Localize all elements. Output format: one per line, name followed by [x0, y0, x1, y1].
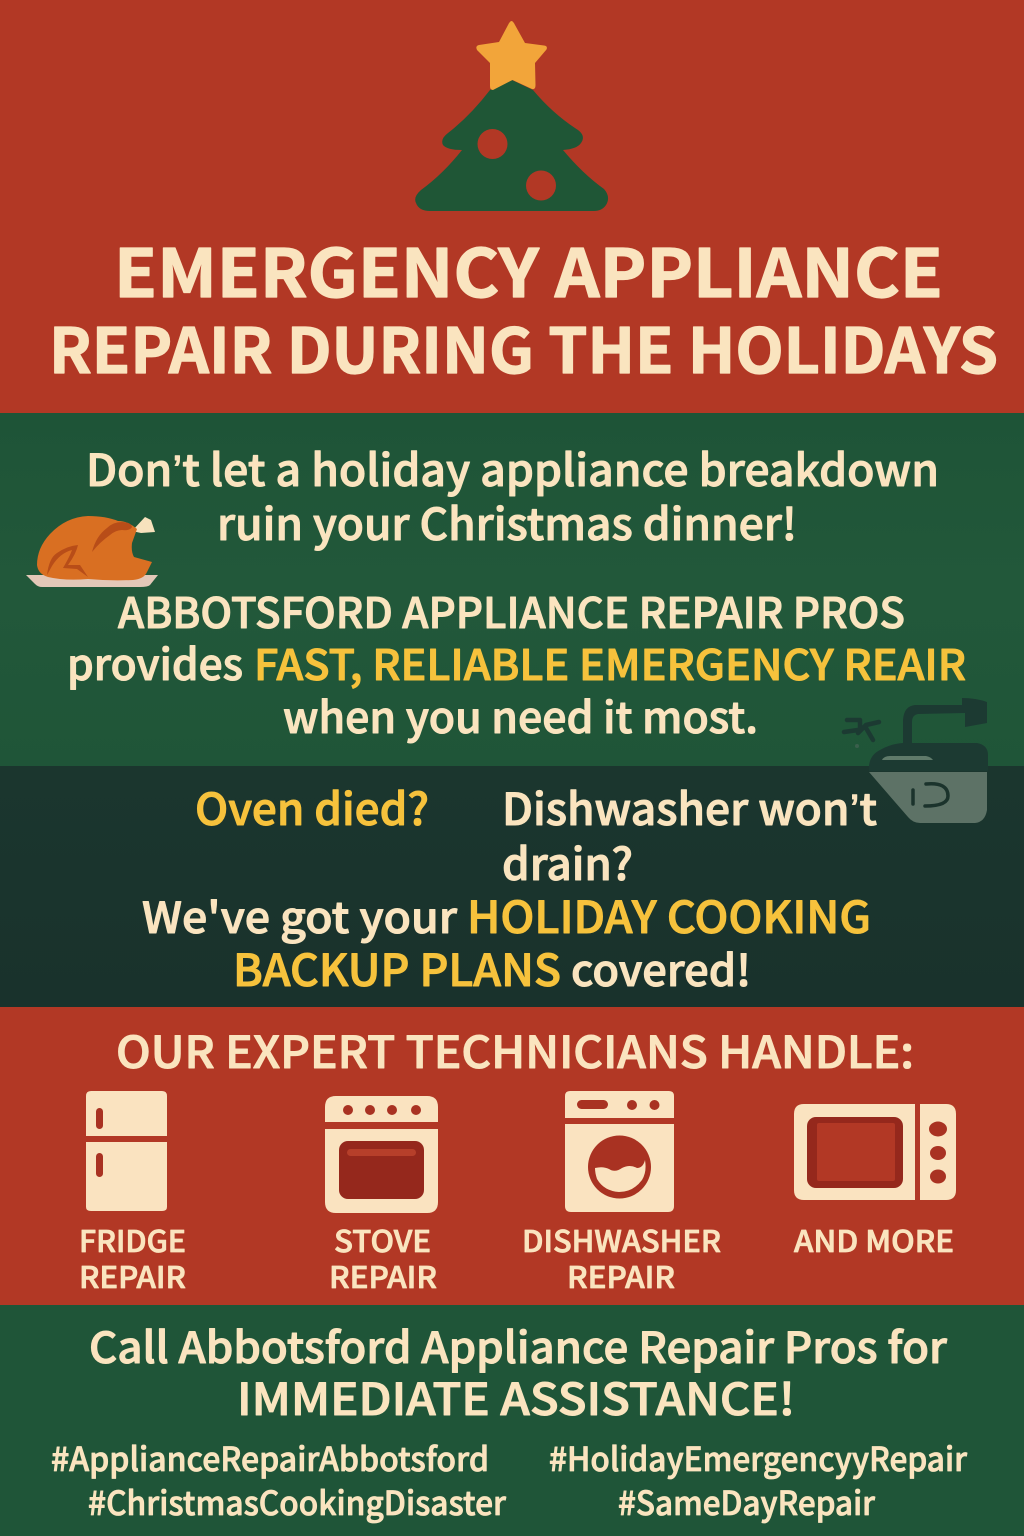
icon: dishwasher: [565, 1091, 674, 1212]
icon: christmas tree: [415, 21, 608, 211]
text: hashtags: #HolidayEmergencyyRepair: [549, 1433, 967, 1481]
text: headline question: ruin your Christmas dinner!: [217, 489, 797, 553]
panel: intro message: [0, 413, 1024, 766]
label: stove repair: REPAIR: [329, 1253, 437, 1297]
text: company pitch: provides: [67, 631, 243, 693]
text: backup plans: HOLIDAY COOKING: [467, 882, 871, 946]
title: [49, 221, 998, 391]
text: dishwasher question: [502, 774, 877, 893]
label: stove repair: [329, 1217, 437, 1297]
label: and more: AND MORE: [794, 1217, 954, 1261]
text: headline question: [86, 435, 939, 553]
panel: call to action: [0, 1305, 1024, 1536]
label: dishwasher repair: DISHWASHER: [522, 1217, 721, 1261]
icon: microwave: [794, 1104, 956, 1200]
panel: services: [0, 1007, 1024, 1305]
text: oven question: Oven died?: [195, 774, 429, 838]
text: company pitch: ABBOTSFORD APPLIANCE REPAIR PROS: [118, 580, 905, 641]
text: company pitch: FAST, RELIABLE EMERGENCY REAIR: [254, 632, 966, 693]
text: call line: Call Abbotsford Appliance Repair Pros for: [89, 1314, 947, 1376]
label: fridge repair: REPAIR: [79, 1253, 186, 1297]
icon: stove: [325, 1096, 438, 1213]
panel: problems: [0, 698, 1024, 1007]
text: dishwasher question: Dishwasher won’t: [502, 774, 877, 838]
text: hashtags: [51, 1433, 967, 1525]
text: backup plans: [142, 882, 871, 999]
label: stove repair: STOVE: [334, 1217, 431, 1261]
text: immediate assistance: IMMEDIATE ASSISTANCE!: [237, 1364, 795, 1428]
icon: fridge: [86, 1091, 167, 1211]
icon: roast turkey: [26, 516, 158, 587]
text: backup plans: We've got your: [142, 884, 457, 946]
text: dishwasher question: drain?: [502, 829, 633, 893]
panel: header: [0, 0, 1024, 413]
text: hashtags: #SameDayRepair: [618, 1477, 875, 1525]
text: headline question: Don’t let a holiday appliance breakdown: [86, 435, 939, 499]
label: fridge repair: [79, 1217, 186, 1297]
label: fridge repair: FRIDGE: [79, 1217, 186, 1261]
heading: technicians: OUR EXPERT TECHNICIANS HANDLE:: [116, 1017, 914, 1081]
label: dishwasher repair: [522, 1217, 721, 1297]
text: hashtags: #ApplianceRepairAbbotsford: [51, 1433, 489, 1481]
title: EMERGENCY APPLIANCE: [114, 221, 943, 317]
text: company pitch: when you need it most.: [283, 684, 758, 746]
text: company pitch: [67, 580, 966, 746]
text: backup plans: BACKUP PLANS: [233, 935, 561, 999]
text: backup plans: covered!: [571, 937, 751, 999]
label: dishwasher repair: REPAIR: [567, 1253, 675, 1297]
icon: broken appliance: [844, 698, 988, 823]
title: REPAIR DURING THE HOLIDAYS: [49, 301, 998, 391]
text: hashtags: #ChristmasCookingDisaster: [88, 1477, 506, 1525]
